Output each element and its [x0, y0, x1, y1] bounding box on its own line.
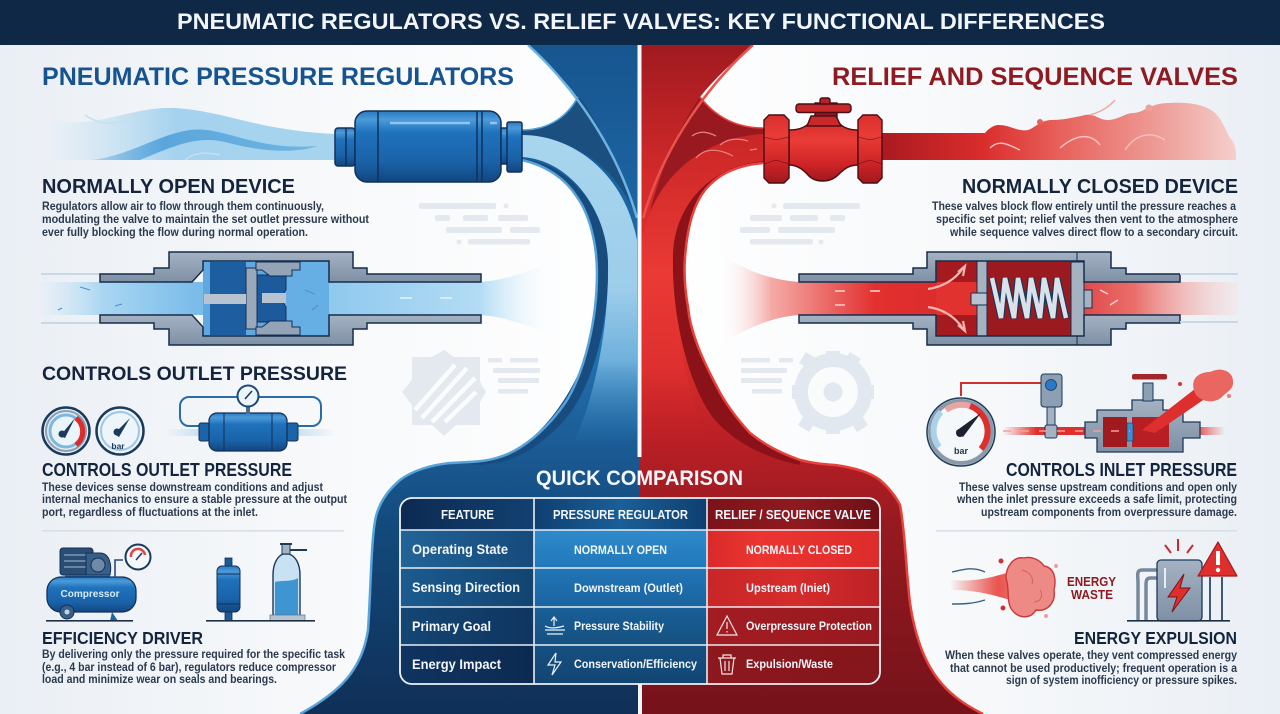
icon: energy waste cloud [950, 557, 1058, 618]
ghost icon: faded shield [402, 350, 486, 436]
text: normally open description: Regulators allow air to flow through them continuously, [42, 199, 324, 213]
icon: regulator with gauge loop [167, 386, 333, 451]
row: energy impact [412, 656, 833, 672]
row: operating state: Operating State [412, 541, 508, 557]
label: energy waste: WASTE [1071, 587, 1113, 602]
heading: controls outlet pressure: CONTROLS OUTLET PRESSURE [42, 460, 292, 480]
text: normally closed description: specific set point; relief valves then vent to the atmosphere [936, 212, 1238, 226]
text: normally open description: ever fully blocking the flow during normal operation. [42, 225, 308, 239]
icon: air compressor: Compressor [60, 588, 120, 600]
row: sensing direction: Upstream (Iniet) [746, 581, 830, 595]
text: outlet pressure description: internal mechanics to ensure a stable pressure at the output [42, 492, 347, 506]
title: PNEUMATIC REGULATORS VS. RELIEF VALVES: KEY FUNCTIONAL DIFFERENCES [177, 9, 1105, 34]
text: efficiency description: load and minimize wear on seals and bearings. [42, 672, 277, 686]
row: primary goal: Pressure Stability [574, 619, 664, 633]
heading: controls outlet pressure (upper): CONTROLS OUTLET PRESSURE [42, 363, 347, 385]
icon: gauge bar: bar [111, 441, 125, 451]
background: left side [0, 45, 640, 714]
icon: lightning bolt [548, 653, 561, 675]
heading: efficiency driver: EFFICIENCY DRIVER [42, 628, 203, 648]
row: operating state [412, 541, 852, 557]
heading: relief and sequence valves: RELIEF AND SEQUENCE VALVES [832, 63, 1238, 91]
icon: red pipe and burst cloud [882, 100, 1236, 160]
text: outlet pressure description: These devices sense downstream conditions and adjust [42, 480, 323, 494]
row: operating state: NORMALLY OPEN [574, 543, 667, 557]
icon: pressure gauge bar: bar [954, 446, 968, 456]
table: comparison [400, 498, 880, 684]
icon: pressure stability [545, 617, 565, 634]
icon: regulator cylinder [335, 111, 522, 182]
text: normally closed description [932, 199, 1238, 239]
table header: PRESSURE REGULATOR [553, 508, 688, 522]
row: operating state: NORMALLY CLOSED [746, 543, 852, 557]
table header [441, 508, 871, 522]
text: energy expulsion description: that cannot be used productively; frequent operation is a [950, 661, 1237, 675]
panel: relief and sequence valves [722, 63, 1238, 687]
center divider lower [638, 684, 642, 714]
icon: pressure gauge bar [927, 383, 1041, 466]
row: primary goal: Primary Goal [412, 618, 491, 634]
ghost decoration: text lines lower right [741, 358, 793, 394]
text: energy expulsion description: When these valves operate, they vent compressed energy [945, 648, 1237, 662]
icon: relief valve venting [1003, 370, 1233, 452]
text: energy expulsion description: sign of system inofficiency or pressure spikes. [1006, 673, 1237, 687]
text: inlet pressure description: upstream components from overpressure damage. [981, 505, 1237, 519]
table header: RELIEF / SEQUENCE VALVE [715, 508, 871, 522]
text: outlet pressure description: port, regardless of fluctuations at the inlet. [42, 505, 258, 519]
row: energy impact: Expulsion/Waste [746, 657, 833, 671]
text: inlet pressure description [956, 480, 1237, 519]
row: primary goal [412, 618, 872, 634]
heading: energy expulsion: ENERGY EXPULSION [1074, 628, 1237, 648]
icon: gauge bar [96, 408, 144, 454]
icon: filter and air bottle [206, 544, 315, 622]
ghost decoration: text lines upper left [419, 203, 540, 244]
row: energy impact: Energy Impact [412, 656, 501, 672]
text: normally open description [42, 199, 369, 239]
text: inlet pressure description: when the inlet pressure exceeds a safe limit, protecting [956, 492, 1237, 506]
text: normally open description: modulating the valve to maintain the set outlet pressure without [42, 212, 369, 226]
text: normally closed description: while sequence valves direct flow to a secondary circuit. [949, 225, 1238, 239]
icon: tank with warning [1127, 539, 1237, 622]
table header: FEATURE [441, 508, 494, 522]
row: primary goal: Overpressure Protection [746, 619, 872, 633]
title bar [0, 0, 1280, 45]
row: energy impact: Conservation/Efficiency [574, 657, 697, 671]
text: efficiency description [42, 647, 345, 686]
text: normally closed description: These valves block flow entirely until the pressure reaches a [932, 199, 1236, 213]
panel: central blue band [300, 45, 640, 714]
icon: gauge with red zone [42, 408, 90, 454]
diagram: regulator cross-section [41, 252, 560, 345]
ghost decoration: text lines lower left [488, 358, 540, 394]
icon: red ball valve [764, 98, 882, 183]
panel: pressure regulators [41, 63, 560, 686]
heading: normally open device: NORMALLY OPEN DEVICE [42, 176, 295, 198]
text: inlet pressure description: These valves sense upstream conditions and open only [959, 480, 1237, 494]
center divider [638, 45, 642, 457]
row: sensing direction [412, 579, 830, 595]
heading: controls inlet pressure: CONTROLS INLET PRESSURE [1006, 460, 1237, 480]
ghost icon: faded gear [792, 351, 874, 434]
label: energy waste: ENERGY [1067, 574, 1116, 589]
text: energy expulsion description [945, 648, 1237, 687]
heading: pneumatic pressure regulators: PNEUMATIC PRESSURE REGULATORS [42, 63, 514, 91]
text: efficiency description: By delivering only the pressure required for the specific task [42, 647, 345, 661]
text: efficiency description: (e.g., 4 bar instead of 6 bar), regulators reduce compressor [42, 660, 336, 674]
icon: warning triangle [717, 616, 737, 635]
row: sensing direction: Downstream (Outlet) [574, 581, 683, 595]
panel: central red band [640, 45, 983, 714]
text: outlet pressure description [42, 480, 347, 519]
heading: normally closed device: NORMALLY CLOSED DEVICE [962, 176, 1238, 198]
ghost decoration: text lines upper right [740, 203, 860, 244]
diagram: relief valve cross-section [722, 252, 1238, 345]
icon: trash can [718, 655, 736, 674]
label: energy waste [1067, 574, 1116, 602]
background: right side [640, 45, 1280, 714]
panel: quick comparison [400, 467, 880, 684]
row: sensing direction: Sensing Direction [412, 579, 520, 595]
heading: quick comparison: QUICK COMPARISON [536, 467, 743, 490]
icon: air compressor [46, 544, 150, 622]
icon: air flow waves [50, 108, 335, 160]
